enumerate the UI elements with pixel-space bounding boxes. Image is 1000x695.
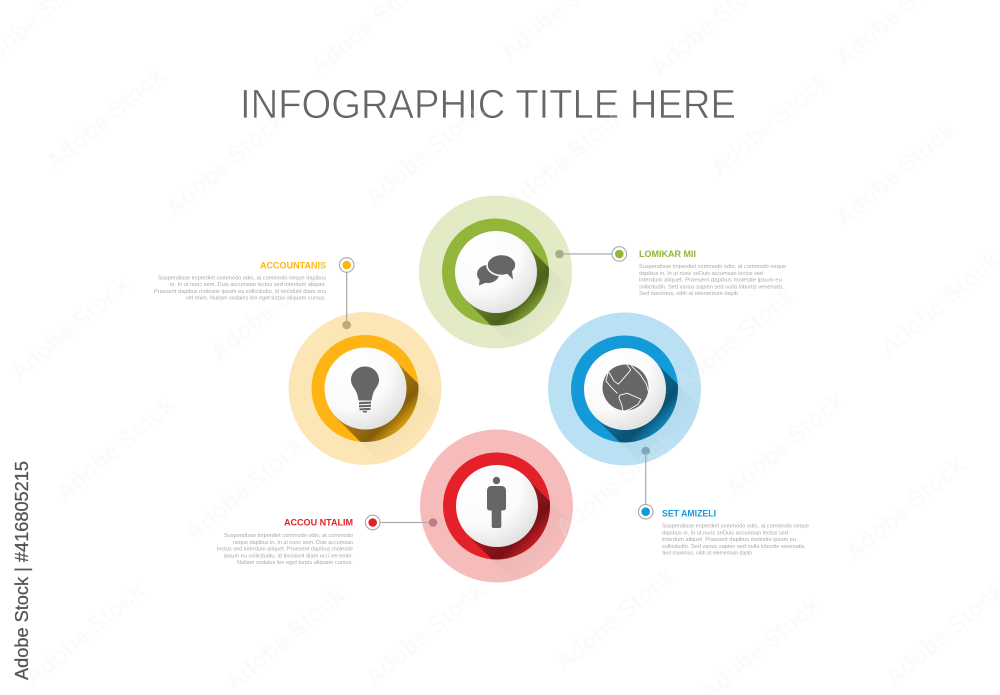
text block: accountanis bbox=[154, 260, 326, 302]
text block: lomikar mii: Suspendisse imperdiet commodo odio, at commodo neque bbox=[639, 264, 786, 270]
text block: accou ntalim: ipsum eu sollicitudiu, id tincidunt diam orci vel enim. bbox=[224, 553, 353, 559]
watermark pattern: Adobe Stock bbox=[160, 106, 291, 222]
text block: accountanis: vel enim. Nullam sodales leo eget turpis aliquam cursus. bbox=[186, 296, 326, 302]
text block: accou ntalim: neque dapibus in. In ut nunc sem. Duis accumsan bbox=[233, 540, 353, 546]
text block: accountanis: Praesent dapibus molestie ipsum eu sollicitudiu, id tincidunt diam orci bbox=[154, 289, 326, 295]
text block: set amizeli: SET AMIZELI bbox=[662, 508, 716, 518]
icon: speech bubbles bbox=[477, 254, 516, 286]
text block: accountanis: Suspendisse imperdiet commodo odio, at commodo neque dapibus bbox=[158, 276, 326, 282]
text block: set amizeli: Sed maximus, nibh at elementum dapib bbox=[662, 551, 752, 557]
watermark pattern: Adobe Stock bbox=[5, 271, 136, 387]
text block: accou ntalim bbox=[217, 516, 353, 566]
watermark pattern: Adobe Stock bbox=[360, 576, 491, 692]
text block: lomikar mii: LOMIKAR MII bbox=[639, 248, 696, 259]
panel: blue circle bbox=[548, 312, 704, 468]
watermark pattern: Adobe Stock bbox=[40, 61, 171, 177]
connector: accountanis bbox=[339, 258, 354, 329]
watermark pattern: Adobe Stock bbox=[20, 576, 151, 692]
text block: set amizeli: Suspendisse imperdiet commodo odio, at commodo neque bbox=[662, 524, 809, 530]
panel: red circle bbox=[420, 430, 576, 585]
text block: accountanis: in. In ut nunc sem. Duis accumsan lectus sed interdum aliquet. bbox=[170, 282, 326, 288]
watermark pattern: Adobe Stock bbox=[550, 561, 681, 677]
text block: lomikar mii: Sed maximus, nibh at elementum dapib bbox=[639, 291, 738, 297]
watermark pattern: Adobe Stock bbox=[550, 426, 681, 542]
text block: lomikar mii: sollicitudin. Sed varius sapien sed nulla lobortis venenatis. bbox=[639, 284, 784, 290]
panel: green circle bbox=[419, 196, 574, 351]
watermark pattern: Adobe Stock bbox=[830, 116, 961, 232]
title: INFOGRAPHIC TITLE HERE bbox=[240, 81, 736, 127]
connector: lomikar mii bbox=[555, 247, 627, 261]
icon: globe bbox=[603, 365, 648, 411]
text block: set amizeli: sollicitudin. Sed varius sapien sed nulla lobortis venenatis. bbox=[662, 544, 806, 550]
text block: set amizeli: dapibus in. In ut nunc seDuis accumsan lectus sed bbox=[662, 530, 788, 536]
watermark pattern: Adobe Stock bbox=[840, 451, 971, 567]
text block: lomikar mii bbox=[639, 248, 786, 297]
connector: set amizeli bbox=[638, 447, 653, 519]
watermark pattern: Adobe Stock bbox=[205, 251, 336, 367]
text block: accou ntalim: Suspendisse imperdiet commodo odio, at commodo bbox=[224, 533, 353, 539]
watermark pattern: Adobe Stock bbox=[705, 66, 836, 182]
connector: accou ntalim bbox=[365, 515, 437, 530]
icon: light bulb bbox=[351, 366, 379, 412]
watermark pattern: Adobe Stock bbox=[720, 386, 851, 502]
watermark pattern: Adobe Stock bbox=[360, 96, 491, 212]
icon: person bbox=[487, 477, 506, 528]
watermark pattern: Adobe Stock bbox=[180, 431, 311, 547]
watermark pattern: Adobe Stock bbox=[50, 391, 181, 507]
watermark pattern: Adobe Stock bbox=[220, 581, 351, 695]
watermark pattern: Adobe Stock bbox=[500, 101, 631, 217]
text block: accou ntalim: Nullam sodales leo eget turpis aliquam cursus. bbox=[237, 560, 353, 566]
text block: lomikar mii: interdum aliquet. Praesent dapibus molestie ipsum eu bbox=[639, 278, 782, 284]
text block: accou ntalim: lectus sed interdum aliquet. Praesent dapibus molestie bbox=[217, 547, 353, 553]
stock id label: Adobe Stock | #416805215 bbox=[12, 461, 32, 680]
text block: set amizeli: interdum aliquet. Praesent dapibus molestie ipsum eu bbox=[662, 537, 796, 543]
text block: lomikar mii: dapibus in. In ut nunc seDuis accumsan lectus sed bbox=[639, 271, 763, 277]
panel: orange circle bbox=[288, 312, 444, 468]
text block: accountanis: ACCOUNTANIS bbox=[260, 260, 326, 270]
text block: set amizeli bbox=[662, 508, 809, 557]
watermark pattern: Adobe Stock bbox=[670, 281, 801, 397]
text block: accou ntalim: ACCOU NTALIM bbox=[284, 516, 353, 528]
